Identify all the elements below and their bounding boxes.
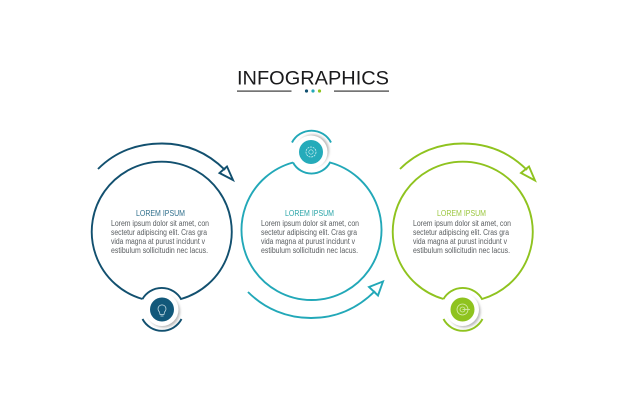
step 3 lower arc — [444, 319, 482, 331]
step 1 body text: estibulum sollicitudin nec lacus. — [111, 246, 208, 255]
step 3 body text — [413, 219, 511, 255]
step 1 arrow — [98, 144, 233, 180]
title: INFOGRAPHICS — [237, 68, 389, 90]
step 1 ring — [92, 162, 232, 299]
step 3 body text: Lorem ipsum dolor sit amet, con — [413, 219, 511, 228]
step 2 heading: LOREM IPSUM — [285, 208, 334, 218]
step 2 body text: vida magna at purust incidunt v — [261, 237, 355, 246]
panel: step 3 — [393, 144, 535, 331]
step 2 ring — [242, 162, 382, 300]
panel: step 1 — [92, 144, 233, 331]
step 3 heading: LOREM IPSUM — [437, 208, 486, 218]
step 3 arrow — [400, 144, 535, 180]
step 2 body text: estibulum sollicitudin nec lacus. — [261, 246, 358, 255]
step 3 icon: target — [446, 293, 480, 328]
step 2 body text — [261, 219, 359, 255]
step 1 icon: light bulb — [146, 293, 180, 328]
panel: step 2 — [242, 131, 383, 318]
step 2 body text: sectetur adipiscing elit. Cras gra — [261, 228, 357, 237]
step 2 upper arc — [292, 131, 331, 142]
step 1 body text: Lorem ipsum dolor sit amet, con — [111, 219, 209, 228]
title divider with dots — [237, 89, 389, 93]
step 3 body text: sectetur adipiscing elit. Cras gra — [413, 228, 509, 237]
step 1 body text — [111, 219, 209, 255]
step 1 body text: sectetur adipiscing elit. Cras gra — [111, 228, 207, 237]
step 1 lower arc — [142, 319, 182, 331]
step 2 body text: Lorem ipsum dolor sit amet, con — [261, 219, 359, 228]
step 1 body text: vida magna at purust incidunt v — [111, 237, 205, 246]
step 2 arrow — [248, 282, 383, 318]
step 2 icon: gear — [294, 134, 329, 168]
step 3 body text: estibulum sollicitudin nec lacus. — [413, 246, 510, 255]
step 3 body text: vida magna at purust incidunt v — [413, 237, 507, 246]
step 3 ring — [393, 162, 533, 299]
step 1 heading: LOREM IPSUM — [136, 208, 185, 218]
